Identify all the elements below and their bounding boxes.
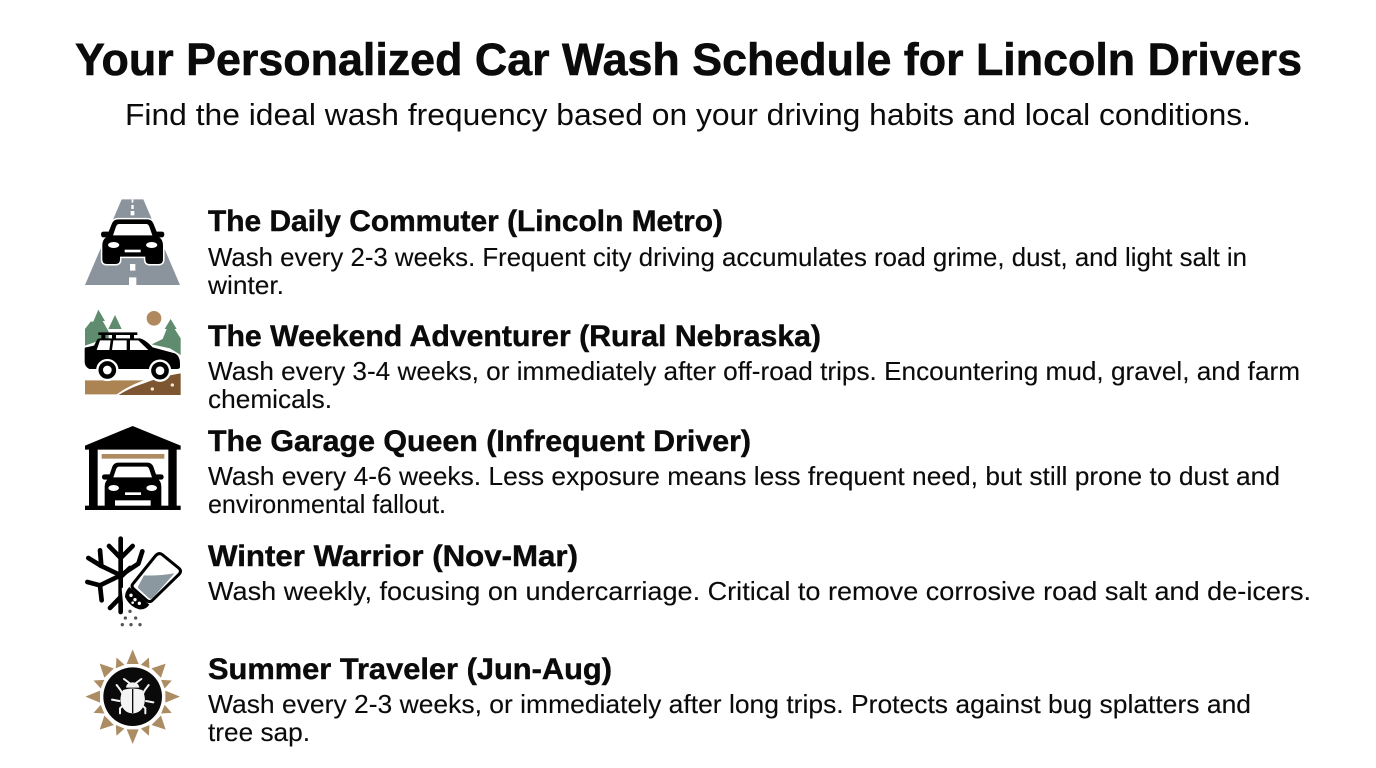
description: chemicals. bbox=[208, 384, 332, 414]
icon: SUV in landscape bbox=[85, 310, 181, 395]
icon: road with car bbox=[85, 199, 180, 285]
description: Wash every 2-3 weeks. Frequent city driving accumulates road grime, dust, and light salt in bbox=[208, 242, 1247, 272]
description: tree sap. bbox=[208, 717, 310, 747]
description bbox=[207, 242, 1247, 300]
description bbox=[208, 356, 1300, 414]
description: Wash weekly, focusing on undercarriage. Critical to remove corrosive road salt and de-icers. bbox=[208, 576, 1311, 606]
icon: sun with bug bbox=[85, 649, 180, 744]
description bbox=[208, 461, 1280, 519]
panel: weekend adventurer bbox=[85, 310, 1300, 414]
description: Wash every 2-3 weeks, or immediately after long trips. Protects against bug splatters and bbox=[208, 689, 1251, 719]
icon: snowflake and salt shaker bbox=[87, 539, 185, 626]
heading: The Weekend Adventurer (Rural Nebraska) bbox=[208, 320, 821, 353]
panel: winter warrior bbox=[87, 539, 1311, 626]
heading: Summer Traveler (Jun-Aug) bbox=[208, 653, 612, 686]
panel: summer traveler bbox=[85, 649, 1251, 747]
panel: daily commuter bbox=[85, 199, 1247, 300]
description: Wash every 4-6 weeks. Less exposure means less frequent need, but still prone to dust and bbox=[208, 461, 1280, 491]
description bbox=[208, 689, 1251, 747]
heading: Winter Warrior (Nov-Mar) bbox=[208, 540, 578, 573]
panel: garage queen bbox=[85, 425, 1280, 519]
description: Wash every 3-4 weeks, or immediately after off-road trips. Encountering mud, gravel, and farm bbox=[208, 356, 1300, 386]
description: environmental fallout. bbox=[208, 489, 446, 519]
heading: The Daily Commuter (Lincoln Metro) bbox=[208, 205, 723, 238]
heading: The Garage Queen (Infrequent Driver) bbox=[208, 425, 751, 458]
icon: garage with car bbox=[85, 426, 181, 510]
title: Your Personalized Car Wash Schedule for Lincoln Drivers bbox=[75, 34, 1302, 85]
description: winter. bbox=[207, 270, 284, 300]
subtitle: Find the ideal wash frequency based on your driving habits and local conditions. bbox=[125, 97, 1251, 132]
